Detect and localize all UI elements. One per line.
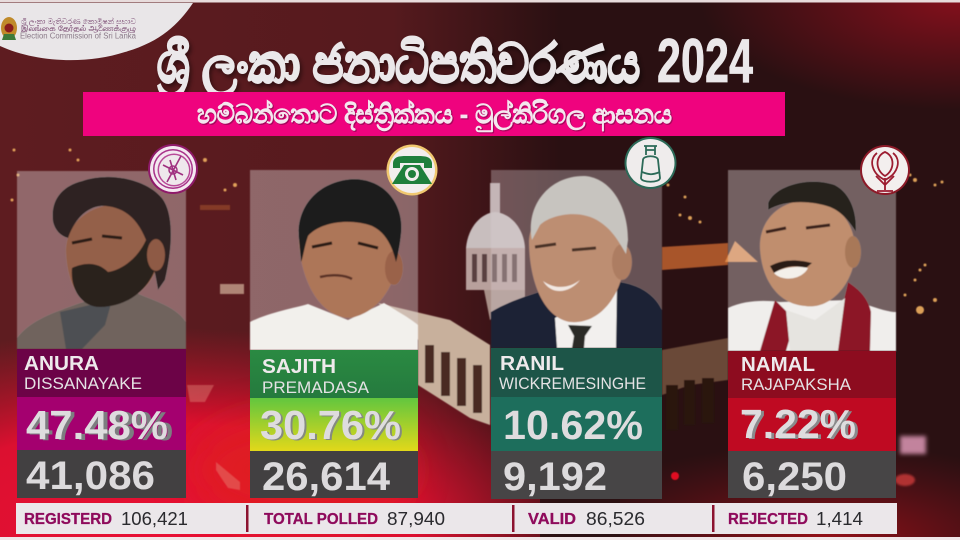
- votes: 41,086: 41,086: [26, 454, 155, 498]
- logo text: ශ්‍රී ලංකා මැතිවරණ කොමිෂන් සභාව: [20, 16, 137, 27]
- icon: lotus bud symbol: [860, 145, 910, 195]
- stat: valid: [528, 509, 645, 529]
- subtitle banner: හම්බන්තොට දිස්ත්‍රික්කය - මුල්කිරිගල ආසනය: [198, 100, 673, 133]
- stat: registered: [24, 509, 188, 529]
- icon: gas cylinder symbol: [624, 137, 676, 189]
- panel: Anura Dissanayake: [17, 144, 198, 498]
- icon: clock symbol: [148, 144, 198, 194]
- logo text: Election Commission of Sri Lanka: [20, 32, 137, 40]
- name: Namal: NAMAL: [741, 353, 815, 376]
- name: Namal: [728, 351, 896, 398]
- percentage: 30.76%: 30.76%: [260, 402, 401, 448]
- votes: 26,614: [250, 451, 418, 499]
- panel: Sajith Premadasa: [250, 144, 438, 499]
- scattered city lights: [10, 148, 944, 314]
- stat: registered: REGISTERD: [24, 511, 112, 528]
- stat: valid: 86,526: [586, 509, 645, 529]
- photo: Ranil: [491, 170, 662, 348]
- logo badge: Election Commission of Sri Lanka: [0, 3, 193, 60]
- title: ශ්‍රී ලංකා ජනාධිපතිවරණය: [157, 34, 640, 98]
- percentage: 7.22%: [728, 398, 896, 451]
- votes: 9,192: 9,192: [503, 455, 607, 499]
- name: Ranil: WICKREMESINGHE: [499, 375, 646, 393]
- percentage: 47.48%: 47.48%: [26, 402, 168, 448]
- photo: Namal: [728, 170, 896, 351]
- stat: total polled: 87,940: [387, 509, 445, 529]
- votes: 9,192: [491, 451, 662, 499]
- votes: 6,250: 6,250: [742, 455, 847, 499]
- votes: 6,250: [728, 451, 896, 499]
- name: Ranil: [491, 348, 662, 397]
- name: Sajith: PREMADASA: [262, 379, 369, 397]
- stat: valid: VALID: [528, 511, 576, 528]
- percentage: 47.48%: 47.48%: [29, 403, 173, 449]
- panel: Ranil Wickremesinghe: [491, 137, 676, 499]
- stat: rejected: [728, 509, 863, 529]
- panel: Namal Rajapaksha: [728, 145, 910, 499]
- photo: Anura: [17, 171, 186, 349]
- name: Anura: ANURA: [24, 352, 99, 375]
- photo: Sajith: [250, 170, 418, 350]
- percentage: 7.22%: 7.22%: [740, 401, 856, 447]
- icon: national emblem: [1, 17, 17, 40]
- votes: 26,614: 26,614: [262, 455, 391, 499]
- name: Sajith: [250, 350, 418, 398]
- street vehicles: [187, 385, 240, 490]
- percentage: 30.76%: 30.76%: [262, 403, 403, 449]
- logo text: [20, 16, 137, 40]
- name: Anura: [17, 349, 186, 397]
- dome: [466, 183, 525, 320]
- stat: total polled: [264, 509, 445, 529]
- name: Ranil: RANIL: [500, 352, 564, 375]
- central lit building: [378, 303, 490, 425]
- logo text: இலங்கை தேர்தல் ஆணைக்குழு: [21, 24, 137, 33]
- right building: [662, 241, 758, 430]
- percentage: 10.62%: 10.62%: [503, 402, 643, 448]
- stat: rejected: REJECTED: [728, 511, 808, 528]
- subtitle banner: හම්බන්තොට දිස්ත්‍රික්කය - මුල්කිරිගල ආසනය: [197, 99, 672, 132]
- name: Namal: RAJAPAKSHA: [741, 376, 851, 394]
- title: ශ්‍රී ලංකා ජනාධිපතිවරණය: [159, 37, 642, 101]
- percentage: 10.62%: [491, 397, 662, 451]
- subtitle banner: [83, 92, 785, 136]
- name: Sajith: SAJITH: [262, 355, 336, 378]
- icon: telephone symbol: [386, 144, 438, 196]
- stat: registered: 106,421: [121, 509, 188, 529]
- votes: 41,086: [17, 450, 186, 498]
- stat: rejected: 1,414: [816, 509, 863, 529]
- stats bar: [16, 503, 897, 534]
- name: Anura: DISSANAYAKE: [24, 375, 142, 393]
- percentage: 7.22%: 7.22%: [743, 402, 859, 448]
- title: 2024: [657, 27, 753, 96]
- stat: total polled: TOTAL POLLED: [264, 511, 378, 528]
